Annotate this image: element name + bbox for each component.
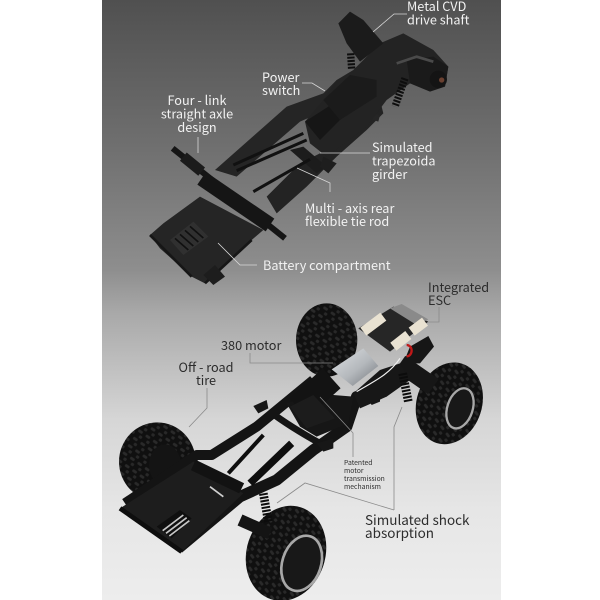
tray rim (120, 508, 182, 552)
bottom chassis (119, 303, 493, 600)
label: patented motor transmission mechanism: transmission (344, 473, 385, 483)
label: off-road tire: Off - road (179, 357, 233, 376)
transmission cylinder (323, 75, 377, 120)
label: multi-axis rear flexible tie rod: flexible tie rod (305, 211, 389, 230)
back-right tire (296, 303, 357, 377)
left frame rail (215, 80, 350, 177)
front shocks (351, 53, 405, 107)
top chassis (150, 12, 448, 285)
rear hub (183, 157, 202, 172)
top leader lines (198, 14, 407, 265)
tie rods (233, 133, 310, 192)
link rods (228, 435, 263, 473)
label: simulated shock absorption: Simulated shock (365, 509, 469, 529)
front mount (403, 336, 434, 363)
rear-left tire (119, 422, 196, 501)
girder tab (320, 157, 337, 173)
label: four-link straight axle design: straight axle (161, 104, 233, 122)
rear axle housing (202, 178, 270, 225)
label: off-road tire: tire (196, 370, 216, 389)
upper crossmember (270, 412, 320, 443)
battery tray edge (150, 235, 252, 283)
cross member (290, 147, 327, 173)
connectors (363, 317, 425, 347)
transmission housing (298, 378, 332, 408)
battery vent (170, 222, 208, 255)
under-motor frame block (353, 363, 410, 408)
front hub (430, 71, 447, 88)
ESC board (358, 307, 428, 352)
front axle beam (400, 363, 433, 387)
lower arm (240, 520, 270, 533)
label: integrated ESC: ESC (428, 290, 451, 309)
ESC shield (390, 304, 428, 325)
label: simulated shock absorption: absorption (365, 522, 434, 542)
lower link (250, 443, 292, 483)
rear-front tire (234, 495, 338, 600)
front-right hub (442, 385, 478, 432)
label: multi-axis rear flexible tie rod: Multi - axis rear (305, 198, 394, 217)
label: patented motor transmission mechanism: mechanism (344, 481, 381, 491)
rear-left wheel hub (149, 444, 181, 486)
left frame rail (125, 380, 313, 503)
rear shock (263, 493, 268, 522)
label: four-link straight axle design: design (177, 117, 217, 136)
motor housing (305, 103, 343, 140)
tray vent (157, 510, 192, 538)
steering arm (397, 57, 433, 63)
gear cover (290, 395, 335, 428)
label: 380 motor: 380 motor (221, 335, 281, 354)
drivetrain silhouette (305, 33, 448, 157)
background panel (102, 0, 501, 600)
front shock (403, 373, 408, 402)
bottom leader lines (189, 307, 439, 510)
tray slot (210, 487, 223, 497)
label: simulated trapezoidal girder: Simulated (372, 137, 433, 156)
label: integrated ESC: Integrated (428, 277, 489, 296)
wiring (357, 358, 400, 392)
rear axle shaft (173, 148, 285, 238)
front-right tire (405, 354, 493, 453)
label: simulated trapezoidal girder: girder (372, 164, 407, 183)
front axle left (338, 12, 383, 62)
380 motor (332, 348, 378, 386)
battery compartment (150, 197, 263, 283)
frame tabs (253, 392, 380, 452)
label: patented motor transmission mechanism: motor (344, 465, 364, 475)
front tab (368, 112, 380, 122)
label: power switch: Power (262, 67, 299, 86)
gear bay (287, 393, 353, 437)
battery tray (120, 462, 243, 552)
label: power switch: switch (262, 80, 300, 99)
rear crossmember (193, 465, 242, 488)
label: battery compartment: Battery compartment (263, 255, 391, 274)
label: simulated trapezoidal girder: trapezoida (372, 150, 435, 170)
battery mount tab (203, 265, 225, 285)
right frame rail (178, 393, 377, 548)
label: four-link straight axle design: Four - link (167, 90, 227, 109)
rear-front hub (275, 530, 329, 596)
label: patented motor transmission mechanism: Patented (344, 457, 373, 467)
label: metal CVD drive shaft: drive shaft (407, 10, 470, 28)
front axle right (407, 57, 448, 92)
right frame rail (267, 100, 383, 213)
